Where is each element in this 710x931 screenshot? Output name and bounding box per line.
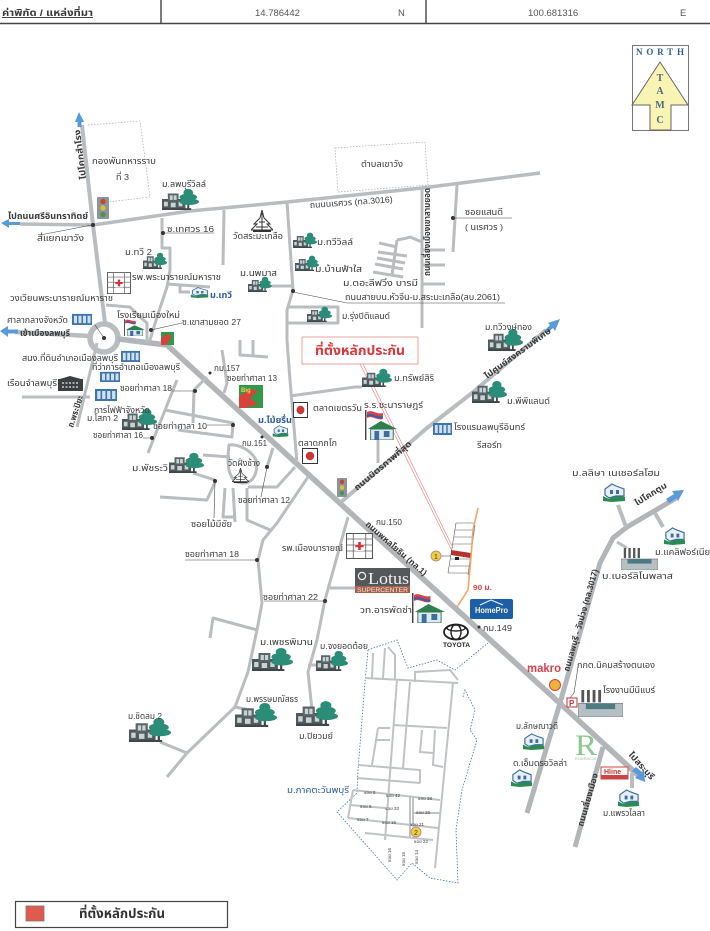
longitude value: 100.681316 xyxy=(528,8,578,19)
side roads north xyxy=(106,185,457,463)
logo: makro: makro xyxy=(527,661,561,675)
pointer from label xyxy=(360,364,453,549)
road label: to Si Inthrathit: ไปถนนศรีอินทราทิตย์ xyxy=(8,211,88,221)
label: Soi Saen Di: ซอยแสนดี xyxy=(465,207,503,217)
labels: north-west xyxy=(7,129,277,473)
label: Sopha 2: ม.โสภา 2 xyxy=(87,413,118,423)
main north-south road xyxy=(82,125,105,323)
label: Soi Thesaworn 16: ซ.เทศวร 16 xyxy=(167,224,214,234)
label: electricity office: การไฟฟ้าจังหวัด xyxy=(94,405,150,415)
icon: Big C large xyxy=(239,385,263,408)
label: Patchara: ม.พัชระวิ xyxy=(132,463,168,473)
road label: Mittraphap: ถนนมิตรภาพที่สุด xyxy=(351,438,413,493)
legend xyxy=(16,902,228,928)
logo: Lotus xyxy=(355,568,410,594)
label: battalion: กองพันทหารราบ xyxy=(92,156,156,166)
label: Berlino Plast: บ.เบอร์ลิโนพลาส xyxy=(602,571,673,581)
label: km 151: กม.151 xyxy=(242,438,267,448)
label: The Living Baramee: ม.ตอะลีฟวิ่ง บารมี xyxy=(343,278,418,288)
label: PP Land: ม.พีพีแลนด์ xyxy=(507,396,550,406)
label: Rung Piti Land: ม.รุ่งปิติแลนด์ xyxy=(342,311,390,321)
icon: P sign xyxy=(567,698,577,708)
access road xyxy=(457,508,478,607)
label: Soi Tha Sala 8: ซอยท่าศาลา 18 xyxy=(120,383,172,393)
soi labels: ซอย 42 xyxy=(386,793,401,798)
Phahonyothin highway xyxy=(118,339,640,777)
label: Thawi Ville: ม.ทวีวิลล์ xyxy=(317,237,353,247)
road label: Phahonyothin: ถนนพหลโยธิน (ทล.1) xyxy=(364,519,429,578)
city entry road xyxy=(15,332,90,336)
icon: Big C small xyxy=(161,332,174,345)
soi labels: ซอย 38 xyxy=(418,796,433,801)
label: Phak Tawan Lopburi: ม.ภาคตะวันพบุรี xyxy=(287,785,349,795)
label: Thawi Thong: ม.ทวีวงษ์ทอง xyxy=(485,322,532,332)
label: Mueang Narai hospital: รพ.เมืองนารายณ์ xyxy=(282,543,343,553)
label: Wat Fang Chang: วัดฝั่งช้าง xyxy=(228,457,260,468)
label: Soi Tha Sala 18: ซอยท่าศาลา 18 xyxy=(185,549,239,559)
label: Mueang Mai school: โรงเรียนเมืองใหม่ xyxy=(117,310,180,320)
icons: government buildings xyxy=(72,314,452,435)
road label: to Saraburi: ไปสระบุรี xyxy=(627,750,657,782)
arrow northeast xyxy=(544,319,560,333)
label: Araphatsa college: วท.อารพัดซ่า xyxy=(360,605,412,615)
soi labels: ซอย 16 xyxy=(387,847,392,862)
label: Piyarom: ม.ปิยวมย์ xyxy=(299,731,333,741)
logo: Hi-line store xyxy=(601,767,628,779)
label: Soi Tha Sala 16: ซอยท่าศาลา 16 xyxy=(93,430,143,440)
logo: R green: ROBINSON xyxy=(575,756,596,761)
north arrow: C xyxy=(656,115,664,126)
label: Khao Wang junction: สี่แยกเขาวัง xyxy=(37,232,85,243)
labels: north-east xyxy=(233,159,553,493)
soi labels: ซอย 5 xyxy=(364,790,376,795)
Naresuan road xyxy=(20,173,540,225)
label: Khao Sam Yot 27: ซ.เขาสามยอด 27 xyxy=(182,317,241,327)
label: market Khet Rawan: ตลาดเขตรวัน xyxy=(313,403,362,413)
side roads east xyxy=(617,505,663,788)
label: M Drawilla: ด.เอ็มดรอวิลล่า xyxy=(513,758,567,768)
label: California: ม.แคลิฟอร์เนีย xyxy=(655,547,710,557)
north arrow: NORTH xyxy=(636,47,684,57)
logo: Shell xyxy=(550,680,560,690)
icons: markets xyxy=(293,402,318,464)
label: Laksanawadi: ม.ลักษณาวดี xyxy=(516,721,558,731)
label: King Narai roundabout: วงเวียนพระนารายณ์มหาราช xyxy=(10,293,113,303)
label: Lopburi Ville: ม.ลพบุรีวิลล์ xyxy=(162,179,206,189)
soi labels: ซอย 33 xyxy=(385,806,400,811)
icons: hospitals xyxy=(107,272,372,558)
label: km 157: กม.157 xyxy=(214,363,240,373)
soi labels xyxy=(357,790,433,866)
icons: factories xyxy=(578,548,658,717)
logo: Toyota: TOYOTA xyxy=(443,642,470,649)
latitude value: 14.786442 xyxy=(255,8,300,19)
icons: small houses xyxy=(191,288,685,807)
dotted boundary: army battalion xyxy=(88,121,150,203)
label: Wat Sa Makluea: วัดสระมะเกลือ xyxy=(233,231,283,241)
marker 1: 1 xyxy=(434,554,438,561)
node markers xyxy=(40,216,578,698)
distance label: 90 ม. xyxy=(473,583,492,592)
label: prison: เรือนจำลพบุรี xyxy=(7,378,57,388)
road label: Naresuan road: ถนนนเรศวร (ทล.3016) xyxy=(309,194,393,210)
road label: special warfare centre: ไปศูนย์สงครามพิเศษ xyxy=(482,325,553,381)
coordinates label: ค่าพิกัด / แหล่งที่มา xyxy=(2,6,93,19)
logo: HomePro: HomePro xyxy=(475,606,508,615)
label: Soi Tha Sala 12: ซอยท่าศาลา 12 xyxy=(238,495,290,505)
label: Lalisa Nature Home: ม.ลลิษา เนเชอร์ลโฮม xyxy=(572,468,660,478)
legend swatch xyxy=(26,906,44,921)
label: provincial hall: ศาลากลางจังหวัด xyxy=(7,315,68,325)
road network xyxy=(15,125,678,847)
icon: prison xyxy=(58,376,83,391)
arrow north xyxy=(75,112,84,127)
label: Soi Tha Sala 22: ซอยท่าศาลา 22 xyxy=(263,592,318,602)
icon: Big C large: Big xyxy=(241,388,251,394)
soi labels: ซอย 14 xyxy=(414,849,419,864)
label: market Kok Ko: ตลาดกกโก xyxy=(298,438,337,448)
labels: centre xyxy=(128,403,512,795)
icons: temples xyxy=(232,210,273,483)
label: number 3: ที่ 3 xyxy=(116,171,129,182)
label: Phansa: ม.พรรษมณัสธร xyxy=(246,694,298,704)
bypass road xyxy=(575,747,603,847)
label: Soi Tha Sala 13: ซอยท่าศาลา 13 xyxy=(227,373,277,383)
callout: collateral location: ที่ตั้งหลักประกัน xyxy=(315,341,405,358)
label: Chong Yot: ม.จงยอดต้อย xyxy=(320,641,368,651)
icons: house and tree estates xyxy=(122,189,523,742)
logo: Lotus: SUPERCENTER xyxy=(357,588,409,594)
label: Noppamat: ม.นพมาส xyxy=(240,268,277,278)
northeast road xyxy=(340,330,546,503)
label: Lopburi Inn Resort: โรงแรมลพบุรีอินทร์ xyxy=(454,422,525,432)
label: King Narai hospital: รพ.พระนารายณ์มหาราช xyxy=(132,272,221,282)
label: Sap Siri: ม.ทรัพย์สิริ xyxy=(394,373,434,383)
legend label: ที่ตั้งหลักประกัน xyxy=(79,904,165,921)
callout: collateral location xyxy=(302,337,418,364)
soi labels: ซอย 21 xyxy=(410,822,425,827)
icons: schools with flags xyxy=(124,319,445,623)
logo: Lotus: Lotus xyxy=(368,569,409,588)
label: Soi Mai Mi Chai: ซอยไม้มีชัย xyxy=(191,519,232,529)
soi labels: ซอย 16 xyxy=(382,820,397,825)
label: land office: สนง.ที่ดินอำเภอเมืองลพบุรี xyxy=(22,352,118,363)
road label: Lopburi Wang Muang: ถนนลพบุรี - วังม่วง (ทล.3017) xyxy=(560,567,600,673)
label: km 150: กม.150 xyxy=(376,517,402,527)
soi labels: ซอย 22 xyxy=(414,839,429,844)
logo: Hi-line store: Hline xyxy=(604,769,621,776)
icons: traffic lights xyxy=(97,197,347,497)
marker 1 xyxy=(431,551,451,561)
logo: R green: R xyxy=(575,729,597,762)
icon: P sign: P xyxy=(569,699,575,708)
north marker: N xyxy=(398,8,405,19)
label: Minebea factory: โรงงานมีนีแบร์ xyxy=(603,685,655,695)
road label: bypass: ถนนเลี่ยงเมือง xyxy=(574,772,600,828)
label: Khao Wang sub-district: ตำบลเขาวัง xyxy=(361,159,403,169)
marker 2 xyxy=(411,827,421,837)
label: Chidlom 2: ม.ชิดลม 2 xyxy=(128,711,162,721)
dotted boundary: sub-district xyxy=(335,142,428,192)
labels: east xyxy=(513,468,710,828)
label: Thawi 2: ม.ทวี 2 xyxy=(125,247,152,257)
arrow east xyxy=(666,490,684,503)
site plan xyxy=(360,364,492,607)
label: Ban Fa Sai: ม.บ้านฟ้าใส xyxy=(315,264,362,274)
arrow south xyxy=(632,767,645,782)
east road xyxy=(527,497,678,813)
road label: into Lopburi: เข้าเมืองลพบุรี xyxy=(20,328,71,338)
label: district office: ที่ว่าการอำเภอเมืองลพบุรี xyxy=(92,361,180,372)
north arrow: T xyxy=(657,73,664,84)
road arrows xyxy=(0,112,684,782)
label: Phrae Lila: ม.แพรวไลลา xyxy=(603,808,645,818)
label: self-help settlement: กกต.นิคมสร้างตนเอง xyxy=(577,660,655,670)
road label: route 2061: ถนนสายบน.หัวจีน-ม.สระมะเกลือ(ลบ.2061) xyxy=(345,292,500,302)
label: Phetchara Phiman: ม.เพชรพิมาน xyxy=(260,637,313,647)
road label: Khao Sam Yot bypass: ถนนเลี่ยงเมืองเขาสามยอด xyxy=(421,188,432,276)
collateral plot xyxy=(451,550,471,558)
east marker: E xyxy=(680,8,686,19)
arrow west city xyxy=(0,326,18,337)
north arrow: A xyxy=(656,86,664,97)
label: Soi Tha Sala 10: ซอยท่าศาลา 10 xyxy=(153,421,207,431)
soi labels: ซอย 7 xyxy=(357,817,369,822)
soi labels: ซอย 15 xyxy=(401,851,406,866)
arrow west top xyxy=(1,219,20,228)
road label: Phra Piya: ถ.พระปิยะ xyxy=(65,394,85,429)
soi labels: ซอย 26 xyxy=(416,810,431,815)
soi labels: ซอย 6 xyxy=(360,804,372,809)
label: resort: รีสอร์ท xyxy=(477,440,502,450)
label: Mai Ruen: ม.ไม้ยรื่น xyxy=(258,414,292,425)
logo: Toyota xyxy=(443,624,470,649)
side roads centre xyxy=(22,340,355,777)
north arrow xyxy=(632,46,688,130)
label: Chanarat school: ร.ร.ชะนาราษฎร์ xyxy=(364,400,423,410)
north arrow: M xyxy=(655,100,665,111)
housing estate plan xyxy=(337,640,488,883)
road label: to Khok Tum: ไปโคกตูม xyxy=(633,480,669,508)
marker 2: 2 xyxy=(414,830,418,837)
label: Thewi: ม.เทวี xyxy=(210,290,232,300)
header table xyxy=(0,0,710,24)
label: Naresuan in brackets: ( นเรศวร ) xyxy=(465,222,503,232)
logo: HomePro xyxy=(470,599,513,619)
road label: to Khok Samrong: ไปโคกสำโรง xyxy=(72,129,88,180)
roundabout xyxy=(90,324,118,352)
label: km 149: กม.149 xyxy=(483,623,512,633)
